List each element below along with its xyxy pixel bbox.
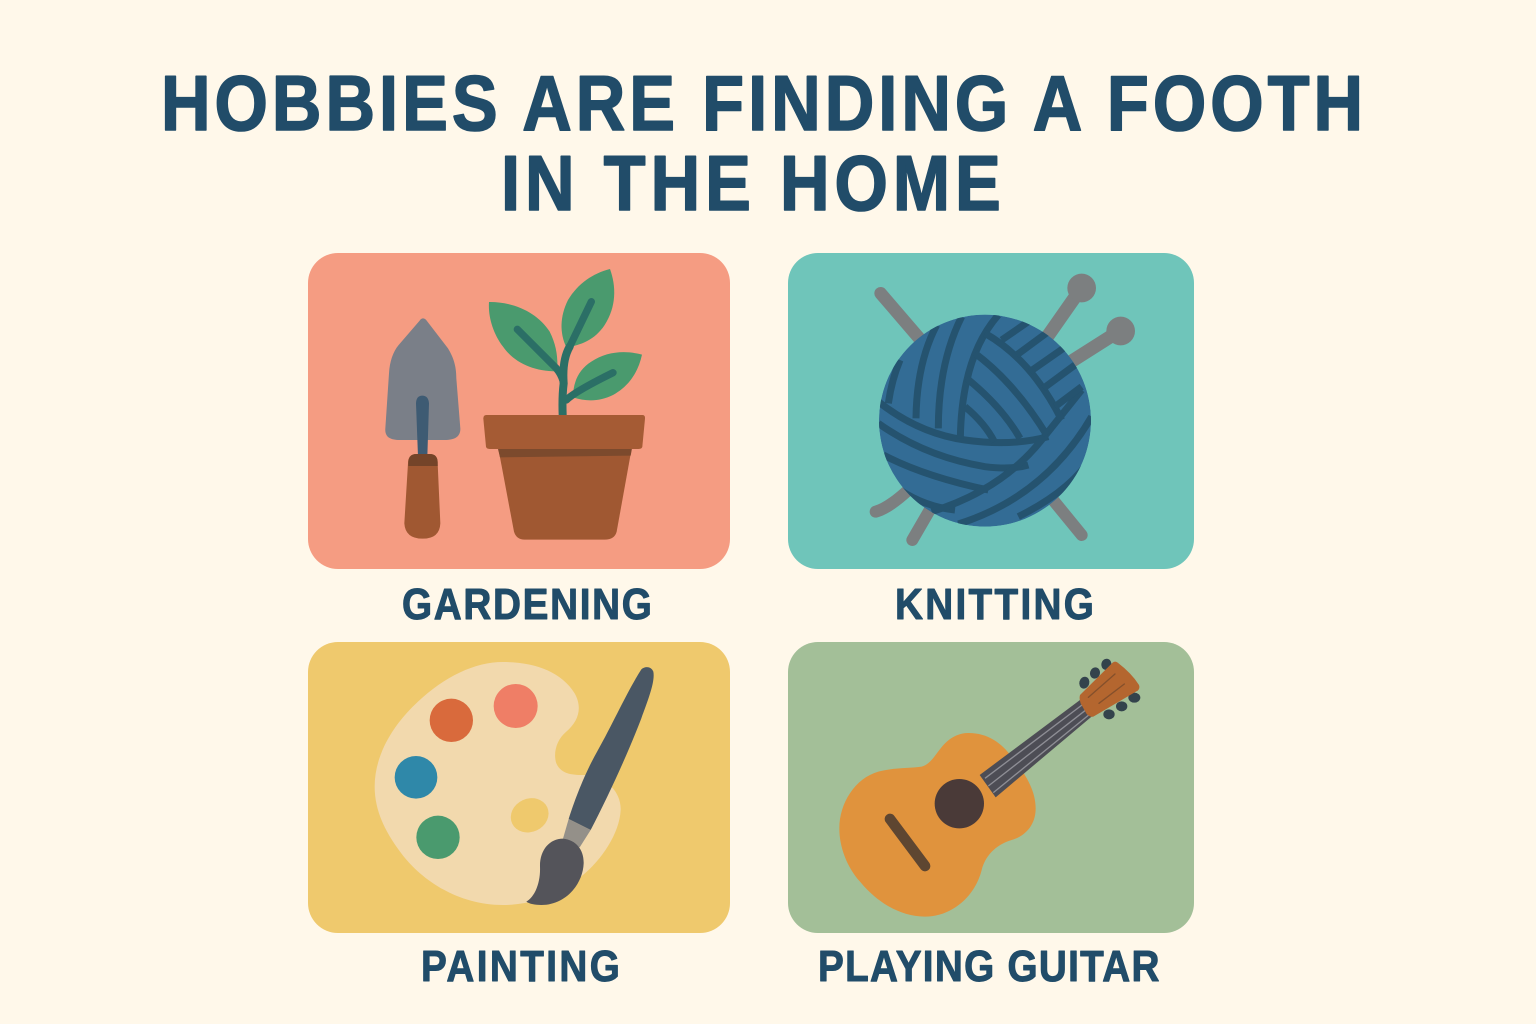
label: gardening: GARDENING — [402, 579, 652, 629]
title: HOBBIES ARE FINDING A FOOTH — [161, 59, 1363, 147]
panel: knitting — [788, 253, 1194, 569]
panel: gardening — [308, 253, 730, 569]
icon: guitar — [839, 658, 1140, 917]
icon: potted plant — [483, 269, 645, 540]
title — [161, 59, 1363, 227]
icon: yarn ball — [878, 315, 1092, 527]
panel: painting — [308, 642, 730, 933]
title: IN THE HOME — [501, 139, 1001, 227]
label: playing guitar: PLAYING GUITAR — [818, 941, 1159, 991]
icon: trowel — [385, 318, 460, 539]
label: knitting: KNITTING — [895, 579, 1094, 629]
icon: paintbrush — [526, 667, 654, 905]
label: painting: PAINTING — [421, 941, 620, 991]
icon: palette — [375, 662, 621, 905]
panel: playing guitar — [788, 642, 1194, 933]
icon: knitting needles — [876, 290, 1118, 540]
